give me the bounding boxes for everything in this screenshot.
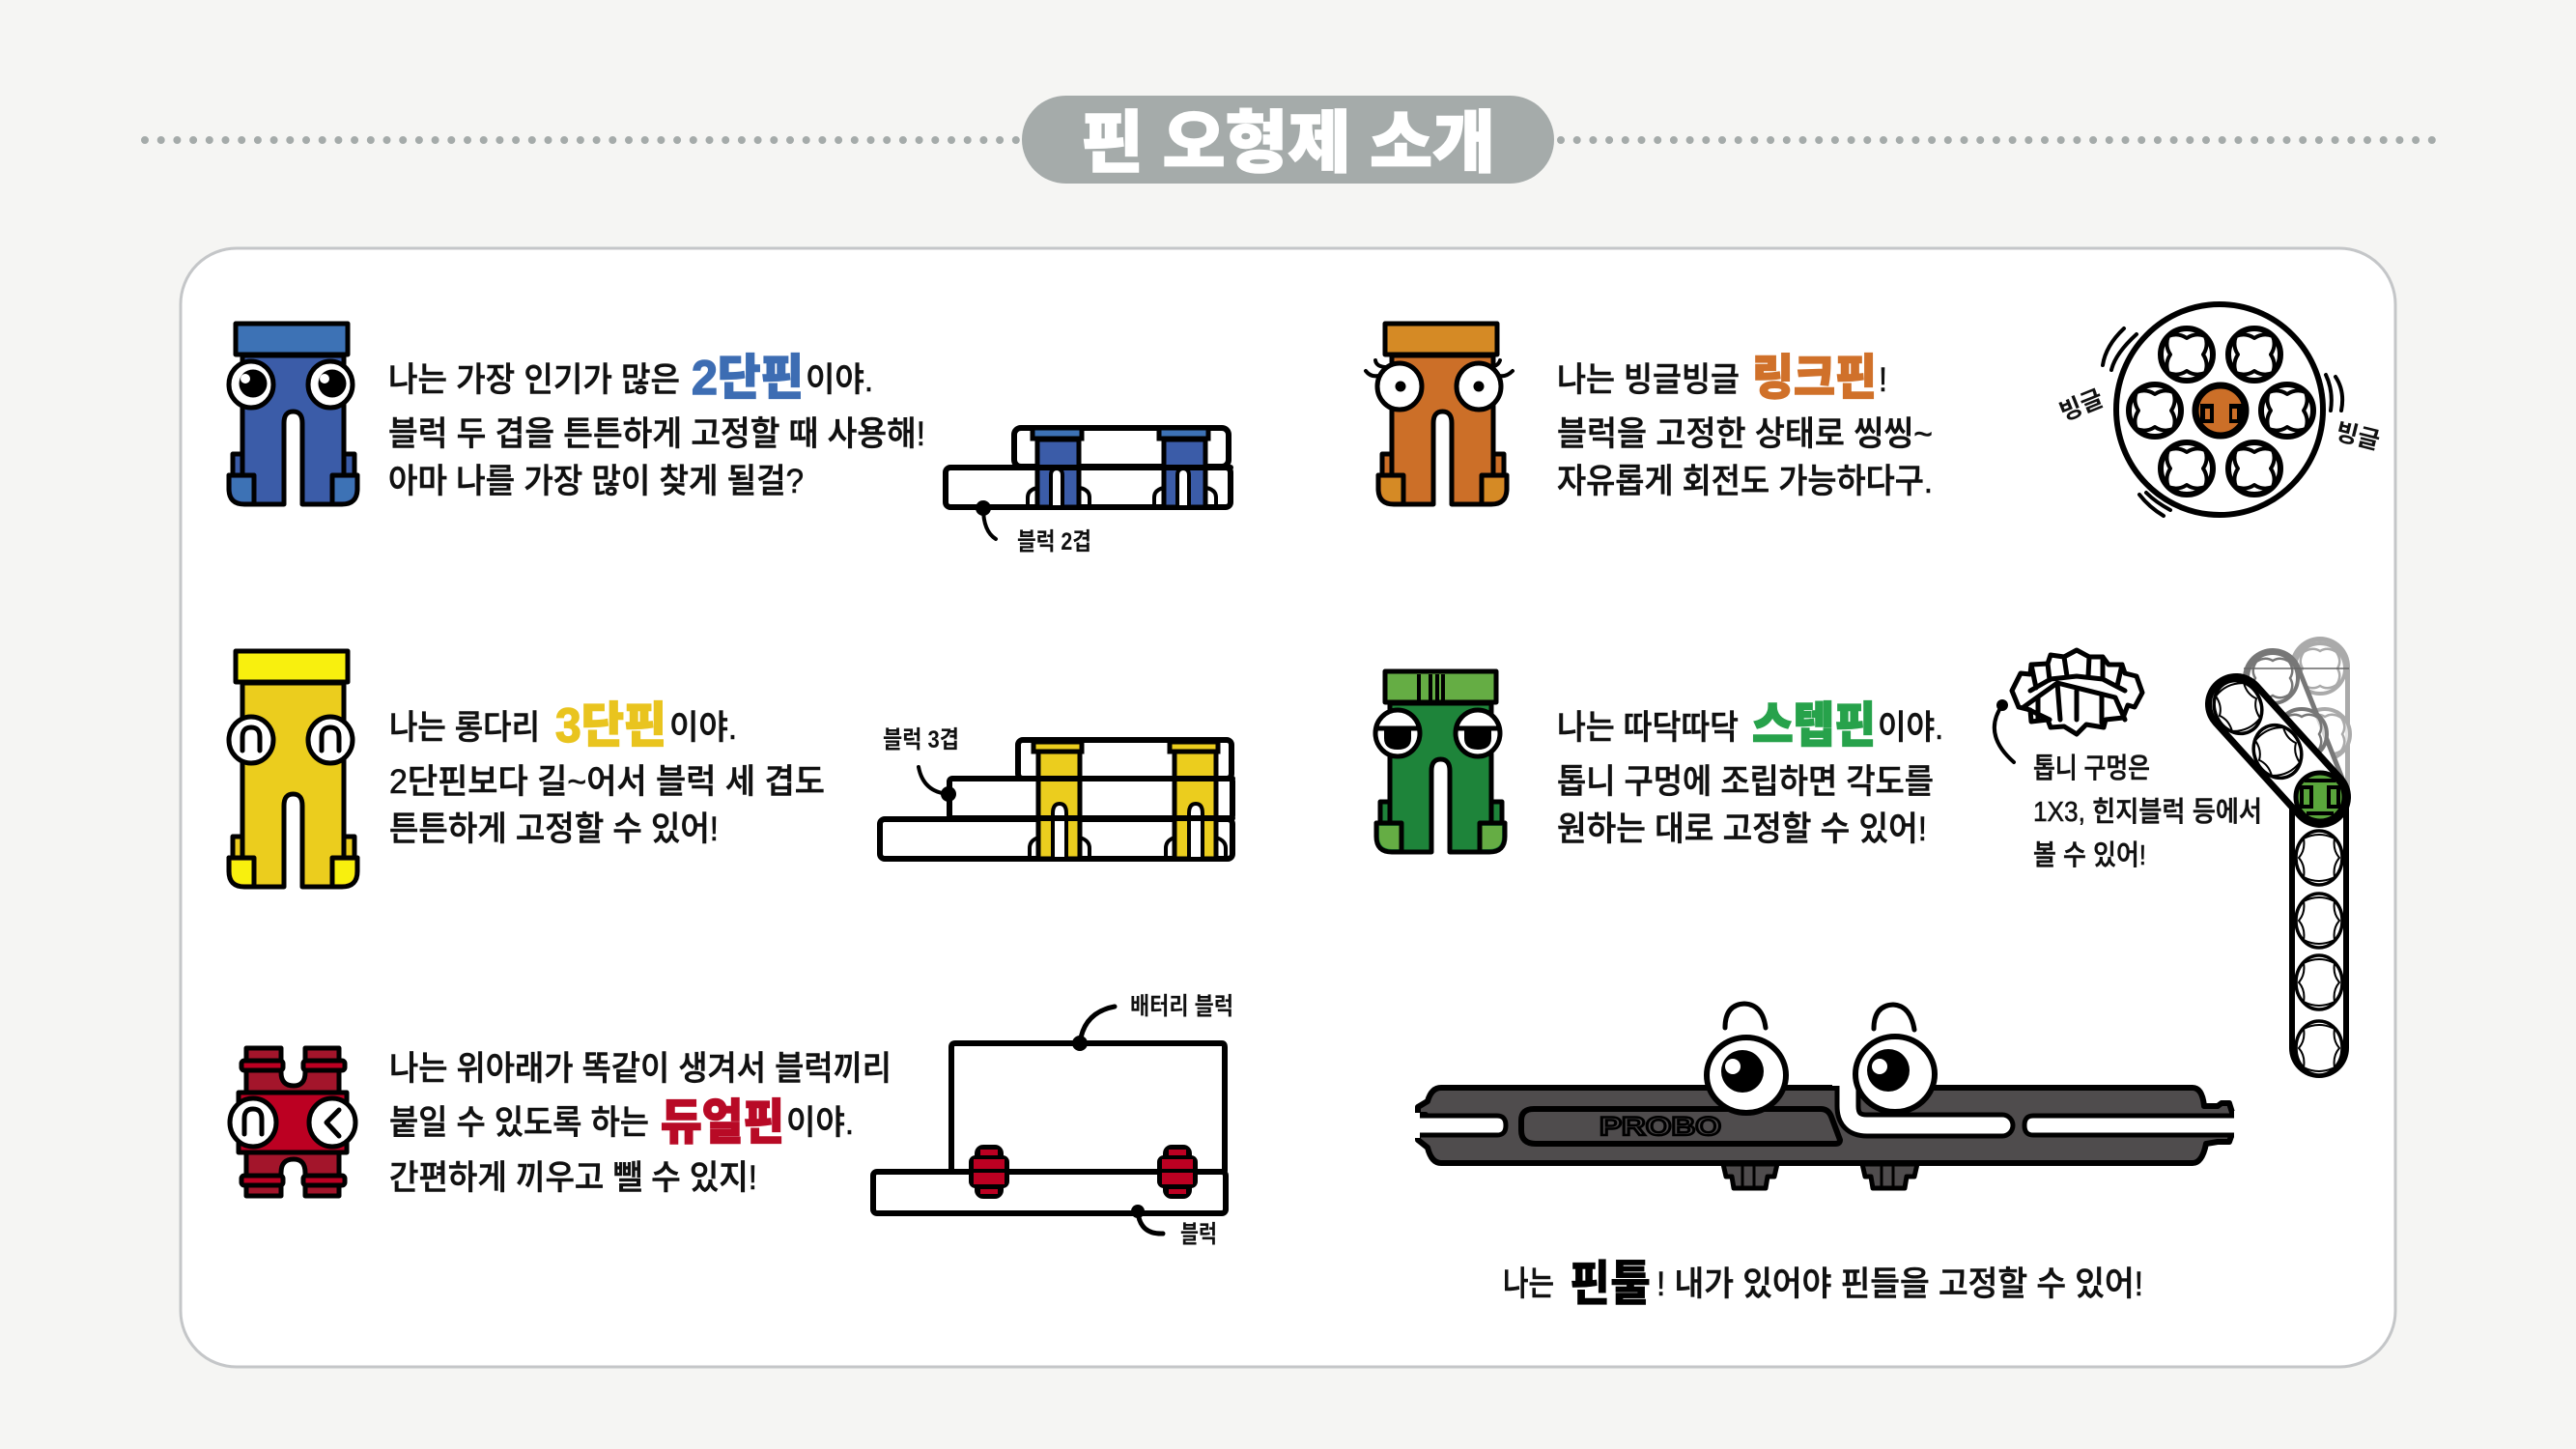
text: 2단핀 description: 나는 가장 인기가 많은 <box>388 361 680 399</box>
text: 듀얼핀 description: 간편하게 끼우고 뺄 수 있지! <box>389 1159 757 1197</box>
text: 링크핀 description: 블럭을 고정한 상태로 씽씽~ <box>1557 415 1933 453</box>
text: 2단핀 description: 아마 나를 가장 많이 찾게 될걸? <box>388 463 804 500</box>
icon: red dual pin character <box>230 1048 355 1196</box>
text: 듀얼핀 description: 듀얼핀 <box>661 1095 784 1150</box>
diagram: rotating beam with step pin <box>2205 643 2350 1075</box>
text: 핀툴 description: ! 내가 있어야 핀들을 고정할 수 있어! <box>1656 1265 2143 1303</box>
diagram: battery block on block: 블럭 <box>1180 1221 1217 1248</box>
text: 3단핀 description: 나는 롱다리 <box>389 709 540 747</box>
text: 듀얼핀 description: 나는 위아래가 똑같이 생겨서 블럭끼리 <box>389 1050 892 1088</box>
icon: pin tool character <box>1410 1004 2242 1188</box>
text: 2단핀 description: 블럭 두 겹을 튼튼하게 고정할 때 사용해! <box>388 415 925 453</box>
text: 링크핀 description <box>1557 351 1933 500</box>
text: 링크핀 description: 링크핀 <box>1752 351 1877 405</box>
text: 링크핀 description: ! <box>1879 361 1887 399</box>
diagram: battery block on block: 배터리 블럭 <box>1130 993 1233 1020</box>
text: 핀툴 description: 핀툴 <box>1570 1257 1651 1311</box>
text: 3단핀 description: 2단핀보다 길~어서 블럭 세 겹도 <box>389 763 825 801</box>
text: 2단핀 description: 이야. <box>806 361 873 399</box>
diagram: three stacked blocks: 블럭 3겹 <box>883 726 959 753</box>
text: 스텝핀 description: 원하는 대로 고정할 수 있어! <box>1557 810 1927 848</box>
note: gear leader and text <box>1995 699 2262 871</box>
diagram: battery block on block <box>873 993 1233 1248</box>
icon: pin tool character: PROBO <box>1599 1112 1721 1141</box>
note: gear leader and text: 톱니 구멍은 <box>2033 753 2150 784</box>
panel: main card <box>181 248 2395 1367</box>
text: 3단핀 description <box>389 698 825 848</box>
text: 스텝핀 description: 스텝핀 <box>1752 698 1876 753</box>
dotted rule right <box>1561 136 2436 144</box>
text: 핀툴 description <box>1503 1257 2143 1311</box>
tool eyes <box>1707 1004 1935 1113</box>
section: 핀툴 <box>1410 1004 2242 1311</box>
diagram: rotating wheel: 빙글 <box>2055 384 2108 427</box>
diagram: three stacked blocks <box>880 726 1232 859</box>
text: 스텝핀 description <box>1557 698 1943 848</box>
diagram: two stacked blocks <box>946 428 1231 555</box>
text: 듀얼핀 description: 이야. <box>786 1104 854 1142</box>
text: 3단핀 description: 3단핀 <box>555 698 666 753</box>
text: 스텝핀 description: 나는 따닥따닥 <box>1557 709 1739 747</box>
icon: blue pin character <box>229 324 357 504</box>
tool feet <box>1723 1164 1917 1188</box>
text: 듀얼핀 description: 붙일 수 있도록 하는 <box>389 1104 649 1142</box>
section: 2단핀 <box>229 324 1231 555</box>
diagram: two stacked blocks: 블럭 2겹 <box>1017 528 1091 555</box>
section: 링크핀 <box>1366 304 2383 516</box>
text: 3단핀 description: 튼튼하게 고정할 수 있어! <box>389 810 719 848</box>
note: gear leader and text: 1X3, 힌지블럭 등에서 <box>2033 796 2262 828</box>
section: 3단핀 <box>229 651 1232 887</box>
icon: orange pin character <box>1366 324 1513 504</box>
dotted rule left <box>145 136 1018 144</box>
diagram: rotating wheel: 빙글 <box>2333 418 2383 455</box>
icon: yellow pin character <box>229 651 357 887</box>
section: 스텝핀 <box>1375 643 2350 1075</box>
note: gear leader and text: 볼 수 있어! <box>2033 839 2146 871</box>
text: 3단핀 description: 이야. <box>669 709 737 747</box>
section: 듀얼핀 <box>230 993 1233 1248</box>
text: 스텝핀 description: 톱니 구멍에 조립하면 각도를 <box>1557 763 1934 801</box>
text: 링크핀 description: 자유롭게 회전도 가능하다구. <box>1557 463 1933 500</box>
title <box>1022 96 1554 184</box>
diagram: rotating wheel <box>2055 304 2383 516</box>
icon: green pin character <box>1375 671 1505 852</box>
text: 2단핀 description: 2단핀 <box>692 351 804 405</box>
text: 핀툴 description: 나는 <box>1503 1265 1554 1303</box>
text: 듀얼핀 description <box>389 1050 892 1197</box>
icon: gear hole <box>2012 650 2142 734</box>
title: 핀 오형제 소개 <box>1081 105 1495 181</box>
text: 스텝핀 description: 이야. <box>1878 709 1943 747</box>
text: 2단핀 description <box>388 351 925 500</box>
text: 링크핀 description: 나는 빙글빙글 <box>1557 361 1740 399</box>
